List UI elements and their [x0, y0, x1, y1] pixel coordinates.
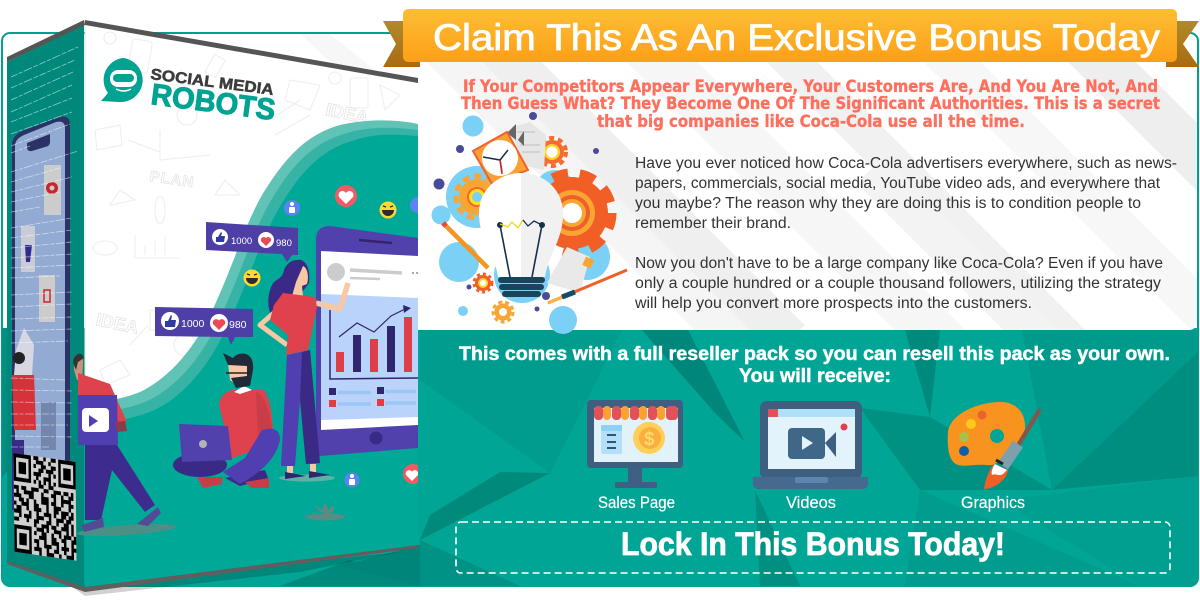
phone with chart [316, 226, 418, 456]
box edges [7, 20, 418, 592]
body text: Now you don't have to be a large company like Coca-Cola? Even if you have [635, 255, 1163, 272]
label: sales page: Sales Page [598, 493, 675, 512]
man with laptop [173, 353, 280, 488]
title: Claim This As An Exclusive Bonus Today [433, 17, 1161, 58]
resale line text: You will receive: [739, 365, 891, 387]
like bubble lower: 980 [229, 319, 247, 331]
body text: you maybe? The reason why they are doing this is to condition people to [635, 195, 1141, 212]
side panel fine print [11, 47, 78, 447]
icons: floating reactions [244, 185, 426, 488]
call to action button: Lock In This Bonus Today! [621, 526, 1005, 562]
like bubble top [206, 222, 298, 262]
icon: light bulb illustration [432, 112, 627, 334]
box shadow [60, 552, 400, 596]
icon: sales page monitor [587, 400, 683, 488]
product box: front face: IDEA [94, 309, 140, 338]
label: graphics: Graphics [961, 493, 1025, 512]
icon: sales page monitor: $ [644, 429, 655, 450]
product box: front face: IDEA [324, 99, 370, 128]
body text: will help you convert more prospects into the customers. [634, 295, 1032, 312]
body text: only a couple hundred or a couple thousand followers, utilizing the strategy [635, 275, 1161, 292]
like bubble lower: 1000 [181, 318, 205, 330]
like bubble top: 980 [276, 238, 292, 249]
panel: white text panel with diagonal stripes [418, 62, 1197, 330]
product box: front face [85, 20, 426, 595]
doodle background [93, 32, 400, 385]
QR code [14, 453, 76, 561]
icon: videos laptop [753, 401, 868, 489]
body text: Have you ever noticed how Coca-Cola advertisers everywhere, such as news- [635, 155, 1177, 172]
body text: remember their brand. [635, 215, 791, 232]
phone graphic on side [12, 117, 70, 510]
woman presenting [260, 260, 348, 482]
label: videos: Videos [786, 493, 836, 512]
product logo [101, 58, 277, 127]
panel: teal lower background [0, 328, 1200, 588]
like bubble lower [155, 307, 253, 345]
product box: side panel [5, 20, 85, 595]
product logo: SOCIAL MEDIA [149, 66, 275, 99]
like bubble top: 1000 [231, 236, 252, 247]
icon: graphics palette [948, 402, 1039, 489]
left ribbon end [383, 21, 420, 67]
red headline: that big companies like Coca-Cola use all the time. [597, 112, 1025, 131]
right ribbon end [1166, 21, 1199, 67]
plant [305, 502, 345, 520]
call to action button [456, 522, 1170, 573]
body text [634, 155, 1177, 312]
body text: papers, commercials, social media, YouTube video ads, and everywhere that [635, 175, 1161, 192]
product box: front face: PLAN [148, 168, 194, 191]
resale line text [459, 343, 1170, 387]
red headline [461, 77, 1160, 131]
person carrying video box [73, 354, 177, 538]
banner [403, 9, 1177, 62]
product logo: ROBOTS [149, 78, 277, 127]
resale line text: This comes with a full reseller pack so you can resell this pack as your own. [459, 343, 1170, 365]
teal curved shape [85, 120, 418, 595]
